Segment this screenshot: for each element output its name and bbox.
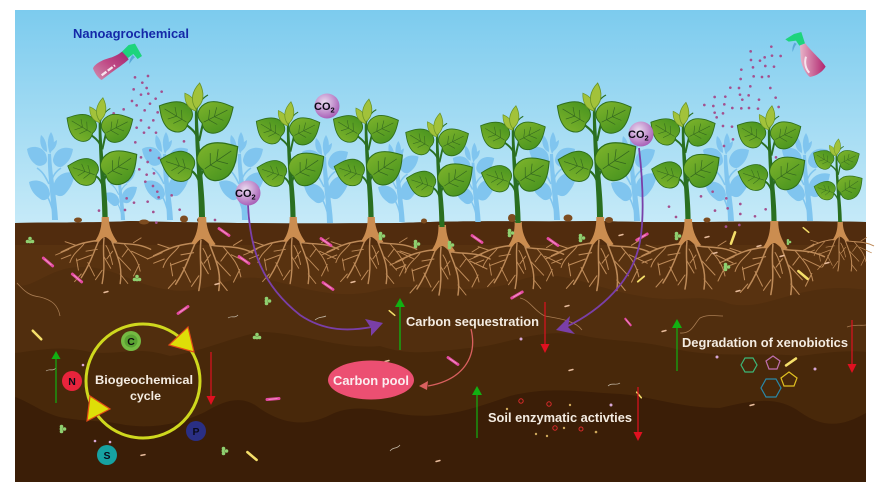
CO2 bubble 2 <box>314 94 340 118</box>
green up arrows (increase) <box>52 298 682 438</box>
CO2 bubble 2: CO <box>314 101 330 113</box>
sky background <box>15 10 866 224</box>
element node: S: S <box>103 450 111 462</box>
CO2 bubble 3 <box>628 122 654 146</box>
spray droplets left <box>98 75 216 224</box>
carbon pool ellipse: Carbon pool <box>333 373 409 388</box>
carbon pool ellipse <box>328 360 414 400</box>
CO2 uptake arc left <box>248 205 383 336</box>
CO2 bubble 2: 2 <box>330 106 335 114</box>
soil microbes <box>26 228 829 462</box>
CO2 bubble 3: CO <box>628 129 644 141</box>
label: Carbon sequestration: Carbon sequestration <box>406 314 539 329</box>
CO2 bubble 3: 2 <box>644 134 649 142</box>
element node: C <box>121 331 141 351</box>
roots <box>17 217 874 333</box>
element node: P <box>186 421 206 441</box>
xenobiotic molecule icons <box>741 356 797 397</box>
soil cross-section <box>15 221 866 482</box>
CO2 bubble 1: 2 <box>252 192 256 202</box>
green plants <box>60 82 869 227</box>
spray droplets right <box>668 45 782 228</box>
label: Degradation of xenobiotics: Degradation of xenobiotics <box>682 336 848 350</box>
CO2 uptake arc right <box>556 148 643 334</box>
red down arrows (decrease) <box>206 302 856 441</box>
icon: spray bottle right <box>785 32 826 77</box>
element node: C: C <box>127 336 135 348</box>
heading: Nanoagrochemical: Nanoagrochemical <box>73 27 189 41</box>
enzyme particles <box>506 399 597 437</box>
element node: S <box>97 445 117 465</box>
background blue plants <box>27 132 830 223</box>
biogeochemical cycle ring <box>86 324 200 438</box>
label: Biogeochemical cycle: cycle <box>130 389 161 403</box>
label: Biogeochemical cycle: Biogeochemical <box>95 373 193 387</box>
CO2 bubble 1: CO <box>235 188 252 200</box>
icon: spray bottle left <box>93 44 142 80</box>
element node: N: N <box>68 376 76 388</box>
label: Soil enzymatic activties: Soil enzymatic activties <box>488 411 632 425</box>
arrow: sequestration to carbon pool <box>419 329 473 390</box>
soil clods <box>74 214 710 224</box>
element node: N <box>62 371 82 391</box>
element node: P: P <box>192 426 200 438</box>
CO2 bubble 1 <box>235 180 260 206</box>
